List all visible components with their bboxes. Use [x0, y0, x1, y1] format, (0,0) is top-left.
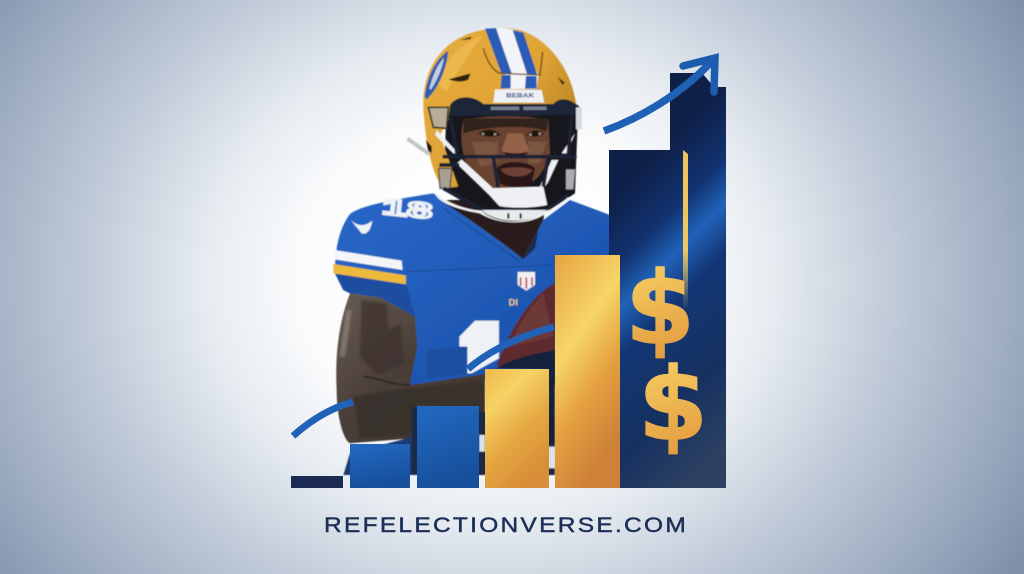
bar: small navy — [291, 476, 343, 488]
jersey torso — [335, 193, 610, 390]
football highlight — [510, 293, 553, 347]
right lower clip — [566, 169, 575, 189]
eye whites — [481, 132, 542, 136]
bar: gold tall — [555, 255, 620, 488]
navy bar fill — [609, 150, 687, 488]
nose — [502, 133, 529, 154]
shell — [423, 28, 577, 188]
arm with tattoos — [336, 293, 485, 443]
bumper — [493, 89, 544, 103]
upper arm tattoos — [360, 300, 405, 375]
player — [333, 28, 610, 475]
forehead shadow — [463, 118, 548, 133]
bar: blue small — [350, 444, 410, 488]
eyes — [478, 130, 544, 137]
jersey sponsor letters: DI — [509, 297, 518, 307]
darker chest patch — [427, 347, 470, 378]
white center stripe — [487, 28, 538, 89]
arrow head — [683, 58, 715, 92]
shield stripes — [521, 277, 532, 289]
shoulder number: 18 — [381, 194, 433, 224]
elbow crease — [363, 377, 410, 385]
shell top highlight — [437, 35, 483, 92]
blue stripes — [485, 28, 537, 89]
left temple clip — [428, 107, 448, 128]
chin vents — [508, 213, 521, 219]
gold edge — [683, 150, 688, 310]
chest seam — [407, 208, 553, 272]
mustache and beard — [497, 162, 535, 187]
right temple clip — [576, 107, 582, 129]
nostrils — [504, 152, 527, 155]
number 1 on chest — [459, 321, 499, 373]
white side pads — [435, 130, 575, 194]
hand — [497, 350, 555, 443]
visor bar — [450, 97, 580, 116]
sleeve dark lower band — [335, 273, 415, 317]
collar base — [507, 230, 538, 259]
tattoo shading — [339, 300, 483, 438]
sleeve gold stripe — [333, 264, 406, 284]
website wordmark: REFELECTIONVERSE.COM — [324, 513, 688, 537]
dark band under forearm — [412, 407, 555, 475]
vents — [448, 37, 565, 85]
visor highlights — [491, 107, 547, 110]
forearm tattoos — [353, 382, 483, 438]
icon: dollar sign lower: $ — [638, 346, 708, 463]
bar: blue medium — [417, 406, 479, 488]
left flap gap — [426, 140, 432, 153]
chin lower cup — [482, 210, 547, 221]
curve: lower left trend line — [293, 402, 353, 436]
arm highlight edge — [339, 310, 352, 357]
shell groove — [483, 48, 543, 75]
pale stripe under forearm — [479, 435, 555, 468]
lower clip — [439, 168, 452, 188]
chin cup — [483, 187, 547, 208]
icon: dollar sign upper: $ — [625, 250, 695, 367]
sleeve white stripe — [334, 250, 403, 270]
face — [461, 116, 550, 189]
bar: gold medium — [485, 369, 549, 488]
jersey under arm — [343, 437, 413, 475]
bumper text: BEBAK — [506, 93, 535, 100]
chin strap left — [407, 139, 429, 154]
neck and collar — [440, 200, 547, 258]
helmet — [407, 28, 582, 222]
bar: tall navy back bar — [670, 73, 726, 488]
logo inner — [429, 57, 444, 90]
helmet side logo — [425, 51, 448, 99]
NFL shield — [517, 272, 535, 291]
football — [497, 283, 555, 367]
arrow shaft — [604, 62, 711, 131]
arrow: upper growth arrow — [604, 58, 715, 131]
chin band — [435, 192, 568, 222]
lips — [501, 167, 533, 177]
swoosh — [351, 220, 372, 234]
bar: navy bar with gold edge — [609, 150, 688, 488]
body — [333, 193, 610, 475]
helmet inner dark — [443, 105, 578, 212]
curve: middle trend line — [468, 327, 554, 369]
cheek highlights — [472, 142, 547, 167]
face mask bars — [439, 115, 577, 210]
